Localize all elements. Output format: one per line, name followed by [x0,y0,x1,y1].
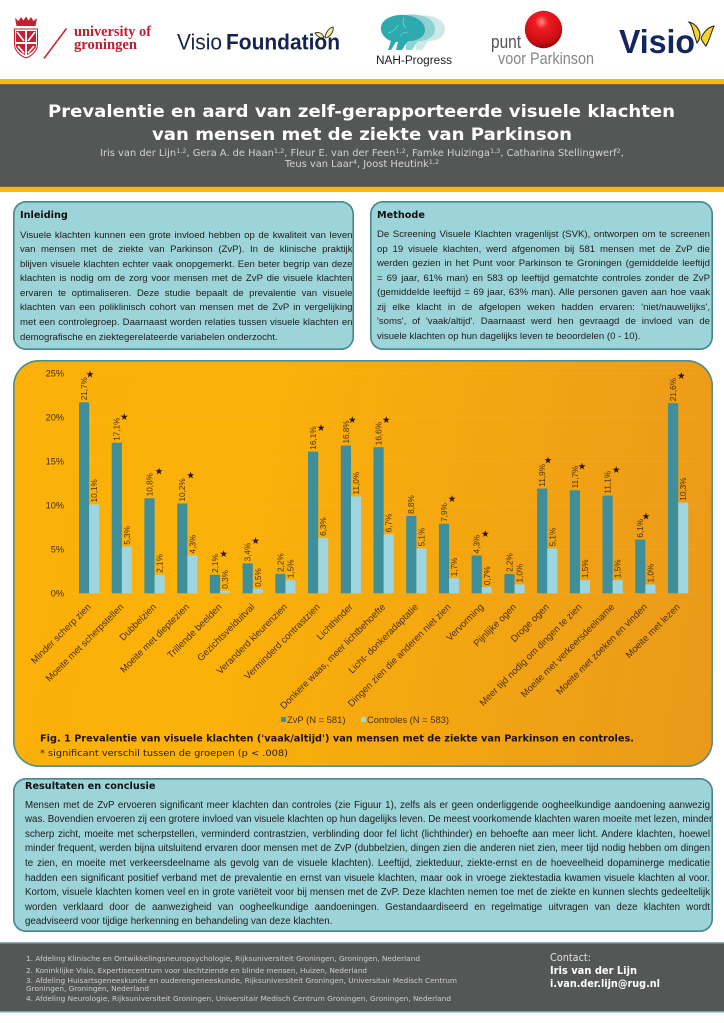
significance stars: ★ [382,415,391,426]
y axis labels: 15% [46,457,64,467]
heading: inleiding: Inleiding [20,210,68,220]
contact: Contact: [550,952,591,964]
value labels: controles: 1,0% [646,564,655,582]
affiliations: 3. Afdeling Huisartsgeneeskunde en ouderengeneeskunde, Rijksuniversiteit Groningen, Universitair Medisch Centrum [26,976,457,985]
value labels: controles: 0,3% [221,570,230,589]
panel: chart [13,360,713,767]
logo: NAH-Progress: NAH-Progress [376,55,452,67]
category labels: Minder scherp zien [29,602,94,666]
text block: methode [377,229,710,342]
authors: Iris van der Lijn1,2, Gera A. de Haan1,2, Fleur E. van der Feen1,2, Famke Huizinga1,3, Catharina Stellingwerf2, [100,146,624,158]
text block: inleiding: klachten van een poliklinisch cohort van mensen met de ZvP in vergelijking [20,302,352,313]
text block: methode: = 69 jaar, 61% man) en 583 op leeftijd gematchte controles zonder de ZvP [377,273,710,284]
logo: Punt voor Parkinson: punt [491,32,521,52]
value labels: controles: 10,1% [90,479,99,502]
significance stars: ★ [448,494,456,505]
significance stars [86,370,686,560]
figure caption: Fig. 1 Prevalentie van visuele klachten ('vaak/altijd') van mensen met de ziekte van Parkinson en controles. [40,734,634,744]
heading: resultaten en conclusie: Resultaten en conclusie [25,781,155,792]
value labels: ZvP: 3,4% [244,543,253,561]
category labels: Pijnlijke ogen [472,602,519,649]
category labels: Droge ogen [509,602,552,645]
text block: resultaten: was. Bovendien ervoeren zij een grotere invloed van visuele klachten op hun dagelijks leven. De meest voorkomende klachten waren moeite met lezen, minder [25,814,712,825]
value labels: ZvP: 2,1% [211,554,220,573]
category labels: Moeite met zoeken en vinden [554,602,650,697]
value labels: controles: 11,0% [352,472,361,494]
text block: resultaten: scherp zicht, moeite met scherpstellen, verminderd contrastzien, verblinding door fel licht (lichthinder) en behoefte aan meer licht. Andere klachten, hoewel [25,829,710,840]
value labels: controles: 5,1% [417,528,426,546]
value labels: controles: 0,7% [483,566,492,585]
header band [0,79,724,192]
title: Prevalentie en aard van zelf-gerapporteerde visuele klachten [48,102,675,122]
affiliations: 4. Afdeling Neurologie, Rijksuniversiteit Groningen, Universitair Medisch Centrum Groningen, Groningen, Nederland [26,994,451,1003]
authors: Teus van Laar4, Joost Heutink1,2 [285,158,439,170]
category labels: Trillende beelden [165,602,225,661]
category labels: Meer tijd nodig om dingen te zien [478,602,584,709]
significance stars: ★ [86,370,94,380]
value labels: ZvP: 21,6% [669,378,678,401]
value labels: controles: 6,3% [319,517,328,536]
category labels: Moeite met scherpstellen [44,602,126,684]
category labels: Moeite met dieptezien [118,602,192,675]
category labels [29,602,683,712]
text block: resultaten: geadviseerd voor tijdige herkenning en behandeling van deze klachten. [25,916,332,927]
legend: ZvP (N = 581) [287,714,345,725]
panel: methode [370,201,713,350]
value labels: ZvP: 16,1% [309,426,318,450]
value labels: ZvP: 16,6% [374,422,384,445]
value labels: controles: 1,5% [581,559,590,578]
bars: ZvP [79,402,678,593]
value labels: ZvP: 17,1% [113,418,122,441]
category labels: Donkere waas, meer lichtbehoefte [278,602,388,712]
text block: inleiding: van mensen met de ziekte van Parkinson (ZvP). In de klinische praktijk [20,244,352,255]
text block: inleiding: ervaren te optimaliseren. Deze studie bepaalt de prevalentie van visuele [20,288,352,299]
affiliations: 1. Afdeling Klinische en Ontwikkelingsneuropsychologie, Rijksuniversiteit Groningen, Groningen, Nederland [26,954,420,963]
value labels: ZvP: 11,9% [538,464,547,487]
significance stars: ★ [317,423,325,434]
significance stars: ★ [677,371,686,382]
logo: Punt voor Parkinson [491,10,594,68]
logo: NAH-Progress [376,14,452,67]
value labels: ZvP: 11,1% [604,471,612,494]
y axis labels: 20% [46,413,64,423]
value labels: controles: 5,3% [123,526,132,545]
panel: resultaten en conclusie [13,778,713,932]
category labels: Vervorming [444,602,486,644]
value labels: ZvP: 16,8% [342,420,351,444]
text block: inleiding: met een controlegroep. Daarnaast worden relaties tussen visuele klachten en [20,317,352,328]
category labels: Lichthinder [315,602,355,642]
significance stars: ★ [642,512,650,522]
logo: university of groningen [14,16,152,59]
text block: resultaten: Kortom, visuele klachten komen veel en in grote variëteit voor bij mensen met de ZvP. Deze klachten nemen toe met de ziekte en kunnen slechts gedeeltelijk [25,887,710,898]
bars: controles [89,496,688,593]
value labels: controles [90,472,688,589]
significance stars: ★ [219,549,228,560]
text block: resultaten [25,800,712,927]
value labels: ZvP: 7,9% [440,503,449,522]
footer band [0,942,724,1013]
value labels: ZvP: 10,2% [178,478,187,502]
category labels: Moeite met verkeersdeelname [519,602,617,700]
text block: methode: (gemiddelde leeftijd = 69 jaar, 63% man). Alle personen gaven aan hoe vaak [377,287,710,298]
category labels: Gezichtsvelduitval [195,602,257,664]
logo: university of groningen: university of [74,24,152,40]
y axis labels: 0% [51,589,64,599]
text block: methode: zij elke klacht in de afgelopen weken hadden ervaren: 'niet/nauwelijks', [377,302,710,313]
category labels: Dingen zien die anderen niet zien [346,602,454,709]
legend [281,714,449,725]
affiliations: Groningen, Groningen, Nederland [26,984,149,993]
value labels: controles: 10,3% [679,477,688,501]
value labels: ZvP: 2,2% [505,553,514,572]
logo: university of groningen: groningen [74,37,138,53]
y axis labels [46,369,64,599]
text block: methode: De Screening Visuele Klachten vragenlijst (SVK), ontworpen om te screenen [377,229,710,240]
significance stars: ★ [120,412,129,423]
text block: resultaten: hadden een significant positief verband met de prevalentie en ernst van visuele klachten, maar ook in vroege ziektestadia kwamen visuele klachten al voor. [25,873,710,884]
heading: methode: Methode [377,210,425,220]
category labels: Verminderd contrastzien [242,602,323,682]
text block: resultaten: Mensen met de ZvP ervoeren significant meer klachten dan controles (zie Figuur 1), zelfs als er geen onderliggende oogheelkundige aandoening aanwezig [25,800,710,811]
value labels: ZvP: 2,2% [276,553,285,572]
category labels: Licht- donkeradaptatie [347,602,421,676]
y axis labels: 10% [46,501,64,511]
text block: inleiding: blijven visuele klachten echter vaak onopgemerkt. Een beter begrip van deze [20,259,352,270]
significance stars: ★ [348,415,357,426]
logo: Visio Foundation [177,26,340,52]
contact: i.van.der.lijn@rug.nl [550,978,660,990]
significance stars: ★ [481,529,490,540]
value labels: ZvP: 8,8% [407,495,416,514]
y axis labels: 5% [51,545,64,555]
text block: inleiding [20,230,352,343]
text block: inleiding: klachten is nodig om de zorg voor mensen met de ZvP die visuele klachten [20,273,352,284]
text block: resultaten: worden verklaard door de aanwezigheid van oogheelkundige aandoeningen. Gestandaardiseerd en regelmatige uitvragen van deze klachten wordt [25,902,710,913]
text block: inleiding: Visuele klachten kunnen een grote invloed hebben op de kwaliteit van leven [20,230,352,240]
text block: methode: visuele klachten op hun dagelijks leven te beoordelen (0 - 10). [377,331,640,342]
text block: resultaten: te zien, en moeite met verkeersdeelname als gevolg van de visuele klachten). Leeftijd, ziekteduur, ziekte-ernst en de hoeveelheid dopaminerge medicatie [25,858,710,869]
significance note: * significant verschil tussen de groepen (p < .008) [40,748,288,759]
category labels: Veranderd kleurenzien [215,602,290,677]
affiliations [26,954,457,1003]
value labels: ZvP: 11,7% [571,466,580,488]
significance stars: ★ [544,456,552,466]
text block: methode: werden gezien in het Punt voor Parkinson te Groningen (gemiddelde leeftijd [377,258,710,269]
contact: Iris van der Lijn [550,965,637,977]
value labels: ZvP: 6,1% [636,519,645,538]
significance stars: ★ [186,470,195,482]
category labels: Moeite met lezen [624,602,683,661]
value labels: ZvP: 21,7% [80,377,89,400]
title [48,102,675,143]
value labels: controles: 5,1% [548,528,557,546]
contact [550,952,660,990]
significance stars: ★ [612,465,621,476]
category labels: Dubbelzien [118,602,159,643]
value labels: controles: 6,7% [385,514,394,532]
panel: inleiding [13,201,354,350]
value labels: controles: 2,1% [156,554,165,573]
text block: methode: 'soms', of 'vaak/altijd'. Daarnaast werd hen gevraagd de invloed van de [377,316,710,327]
value labels: ZvP: 10,8% [145,473,154,496]
text block: resultaten: minder frequent, werden bijna uitsluitend ervaren door mensen met de ZvP (dubbelzien, dingen zien die anderen niet zien, meer tijd nodig hebben om dingen [25,843,710,854]
value labels: ZvP: 4,3% [473,535,482,554]
text block: methode: op 19 visuele klachten, werd afgenomen bij 581 mensen met de ZvP die [377,244,710,255]
significance stars: ★ [155,466,163,478]
value labels: controles: 1,5% [614,559,623,578]
value labels: controles: 0,5% [254,568,263,587]
value labels: controles: 1,0% [516,564,525,582]
value labels: controles: 1,7% [450,558,459,576]
significance stars: ★ [251,536,260,547]
significance stars: ★ [578,462,586,472]
value labels: controles: 1,5% [286,559,296,578]
value labels: ZvP [80,377,678,573]
legend: Controles (N = 583) [367,714,449,725]
value labels: controles: 4,3% [188,535,197,554]
y axis labels: 25% [46,369,64,379]
text block: inleiding: demografische en ziektegerelateerde variabelen onderzocht. [20,332,278,343]
affiliations: 2. Koninklijke Visio, Expertisecentrum voor slechtziende en blinde mensen, Huizen, Nederland [26,966,367,975]
authors [100,146,624,170]
